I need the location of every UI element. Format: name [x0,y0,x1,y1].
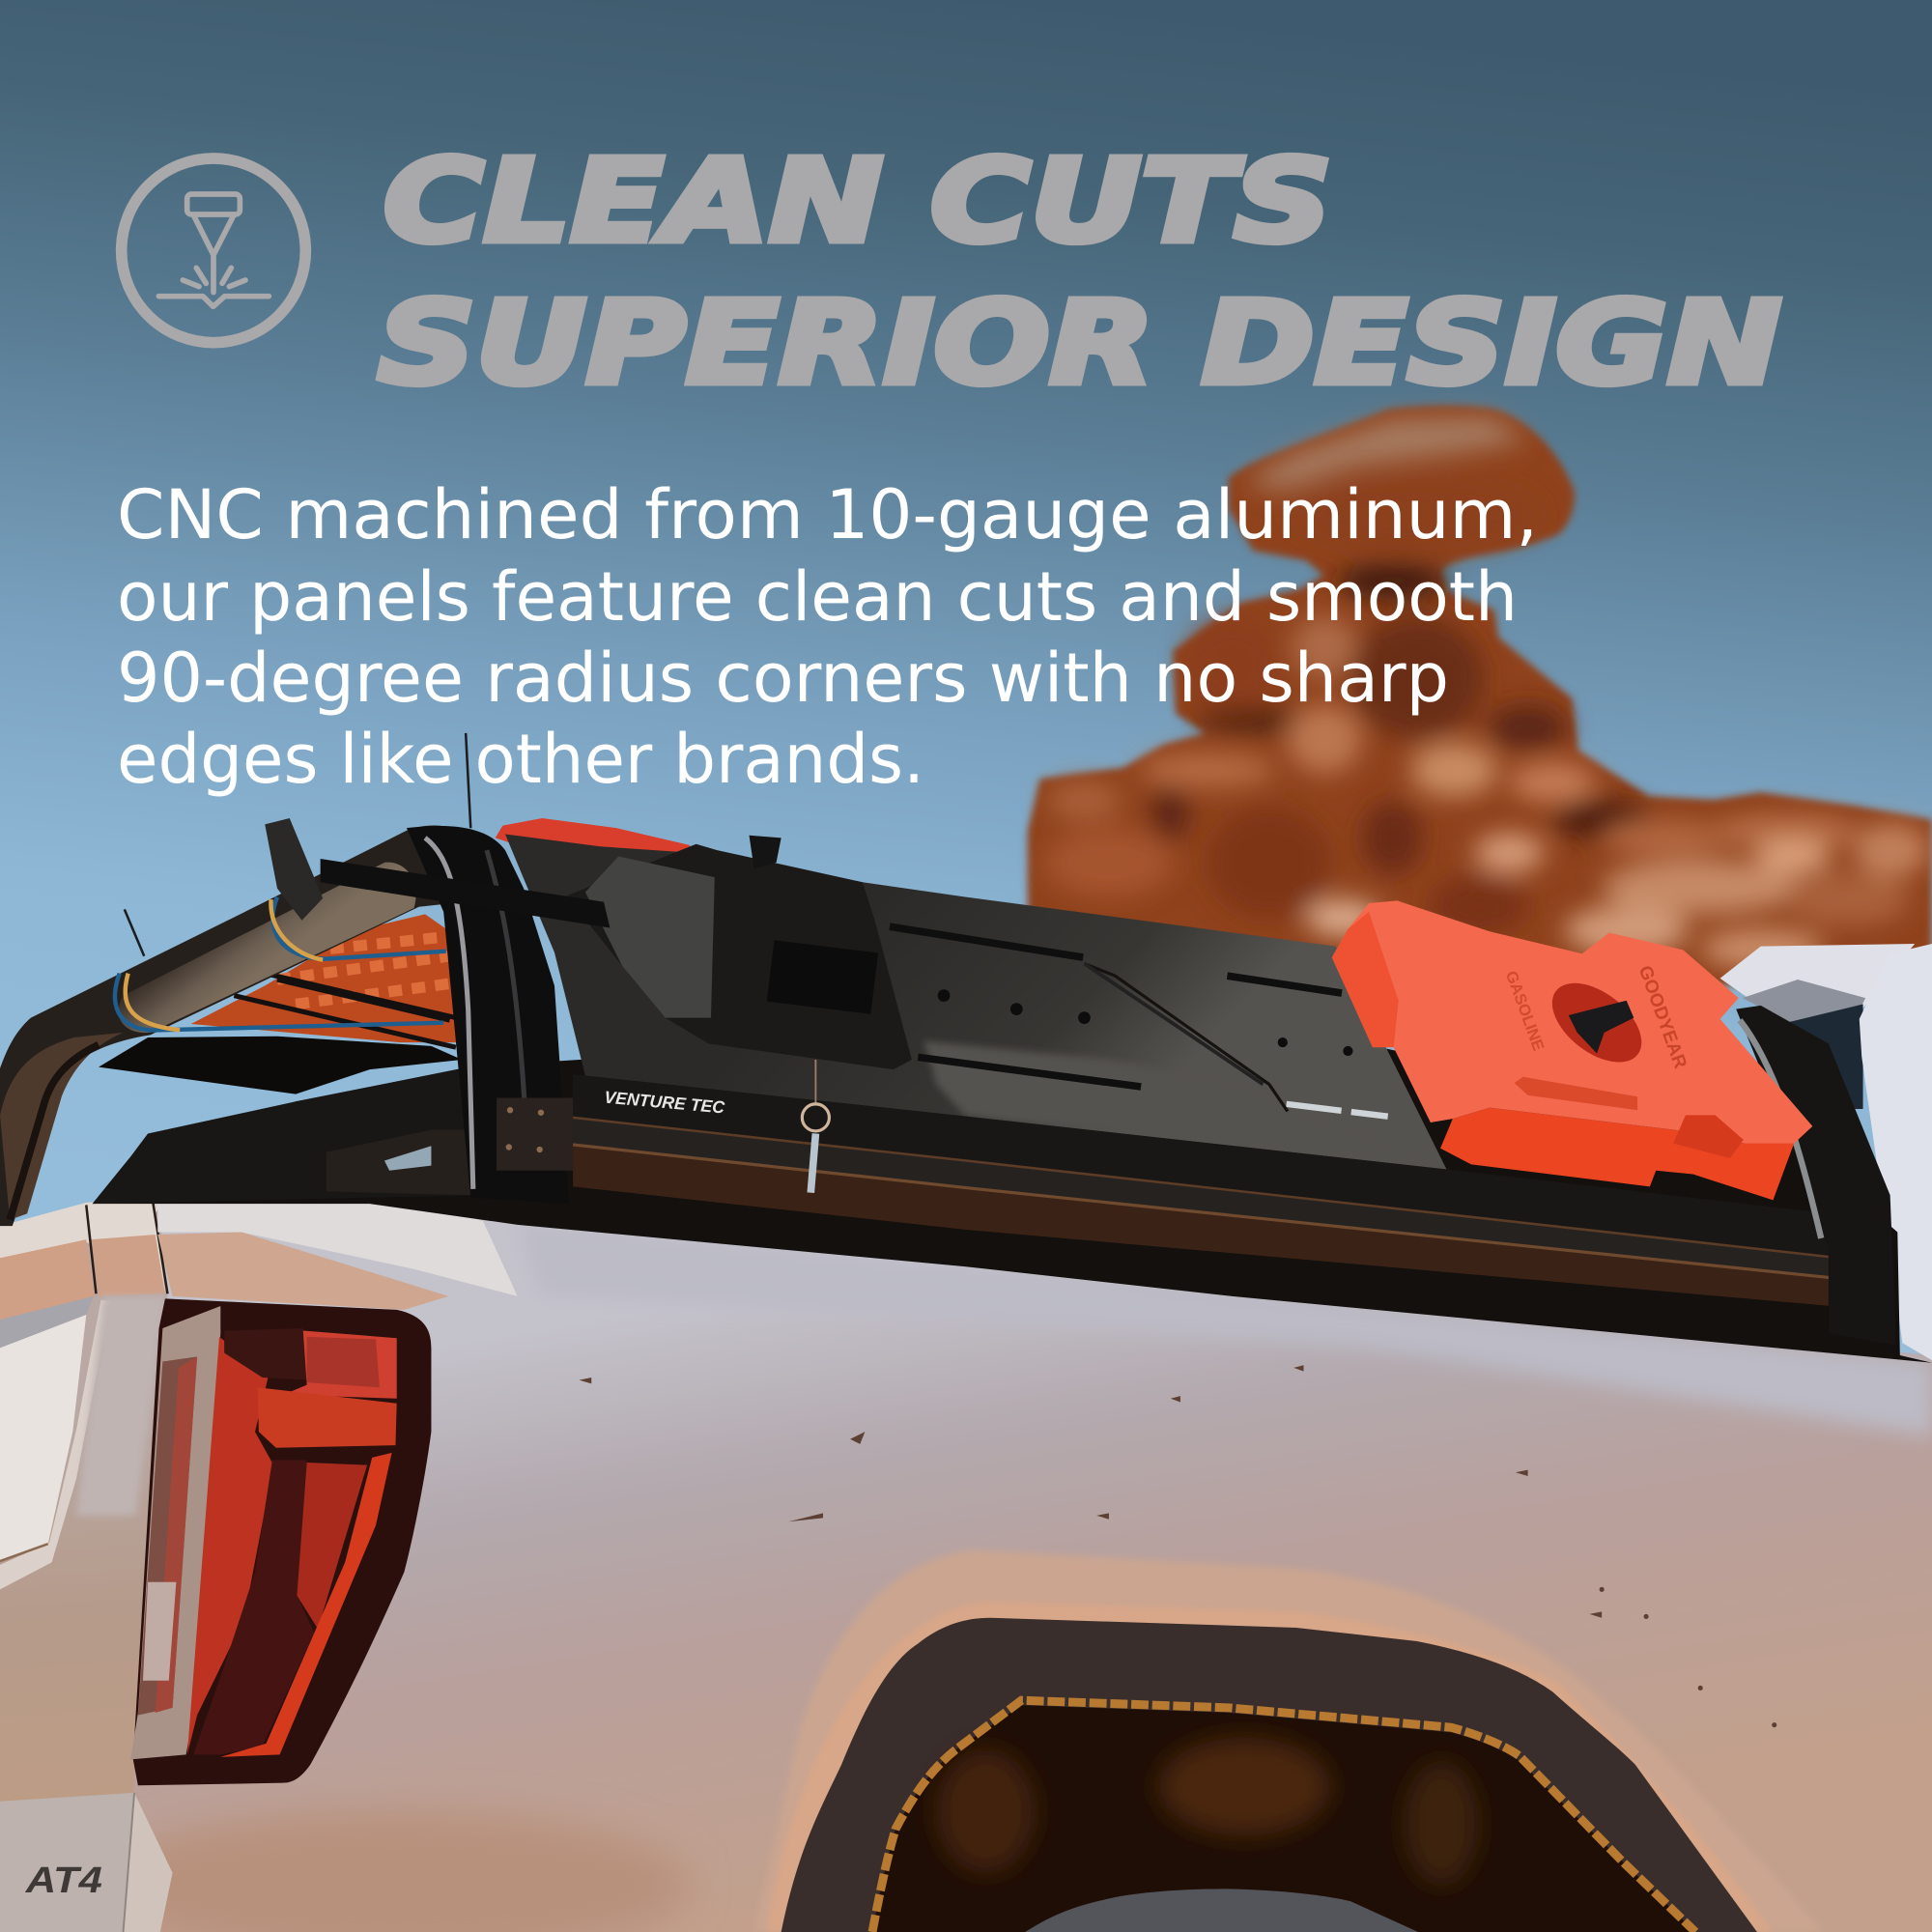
body text: our panels feature clean cuts and smooth [117,557,1518,637]
mud specks [579,1365,1776,1727]
cap [1569,1001,1634,1054]
cool band at top [518,1222,1932,1435]
slot with light [1287,1104,1428,1122]
plate holes [938,989,1353,1056]
body text [117,475,1538,799]
tail light [130,1298,431,1785]
panel seams [86,1202,167,1293]
rotopax fuel pack: GOODYEAR [1634,963,1690,1071]
lower lens [297,1463,367,1629]
corner bracket [497,1097,576,1171]
cab corner panel [0,1198,167,1802]
cab peach band [0,1239,95,1320]
title: SUPERIOR DESIGN [378,276,1781,410]
rock formation [1028,406,1932,985]
handle slot [1515,1077,1637,1110]
cab spoiler right side [1720,944,1932,1360]
right notch [1673,1115,1744,1158]
side recess [1332,912,1399,1047]
wheel well [872,1705,1695,1932]
cab grey shadow [0,1296,94,1348]
tailgate badge: AT4 [25,1860,102,1901]
door handle panel [0,1315,86,1561]
jack mount bracket [567,836,912,1193]
truck body panel [0,1193,1932,1932]
lower warm wash [99,1811,690,1932]
silver housing [130,1306,220,1759]
mid column lilac [76,1296,165,1516]
main lens [187,1337,273,1754]
bed peach under highlight [157,1233,448,1310]
door handle panel surround [0,1300,111,1589]
bright stripe [220,1453,392,1757]
lower cab panel [0,1793,134,1932]
rack black lower mass [93,1047,1932,1363]
plate slots [890,926,1342,1087]
aluminum panel plate [505,835,1446,1169]
cap opening [1538,968,1656,1078]
fender flare and wheel arch [754,1550,1824,1932]
rail bars [573,1074,1831,1306]
title [378,134,1781,410]
strap ties [115,897,446,1031]
tire [1025,1889,1418,1932]
title: CLEAN CUTS [384,134,1332,268]
cab top white strip [0,1198,165,1292]
brand label: VENTURE TEC [604,1088,726,1118]
cable [1084,963,1288,1112]
body text: edges like other brands. [117,720,924,799]
bed top white highlight [157,1203,518,1296]
traction boards [191,818,690,1047]
antenna [125,733,470,956]
upper red block [283,1331,397,1399]
roll bar left tube [0,825,487,1226]
body text: CNC machined from 10-gauge aluminum, [117,475,1538,554]
embossed text: GASOLINE [1502,969,1548,1053]
icon: laser cutter badge [122,158,305,343]
arch trim [781,1618,1757,1932]
red bar [258,1387,397,1448]
dark areas [224,1328,307,1380]
jack tube and head [265,818,610,927]
mud rim [872,1700,1695,1932]
body text: 90-degree radius corners with no sharp [117,639,1449,718]
right hoop [1736,1006,1896,1346]
truck photo scene [0,406,1932,1932]
rotopax fuel pack [1332,900,1812,1200]
lower dark boxes [93,1037,474,1204]
traction board top edge [496,818,690,855]
vertical hoop [407,826,576,1204]
